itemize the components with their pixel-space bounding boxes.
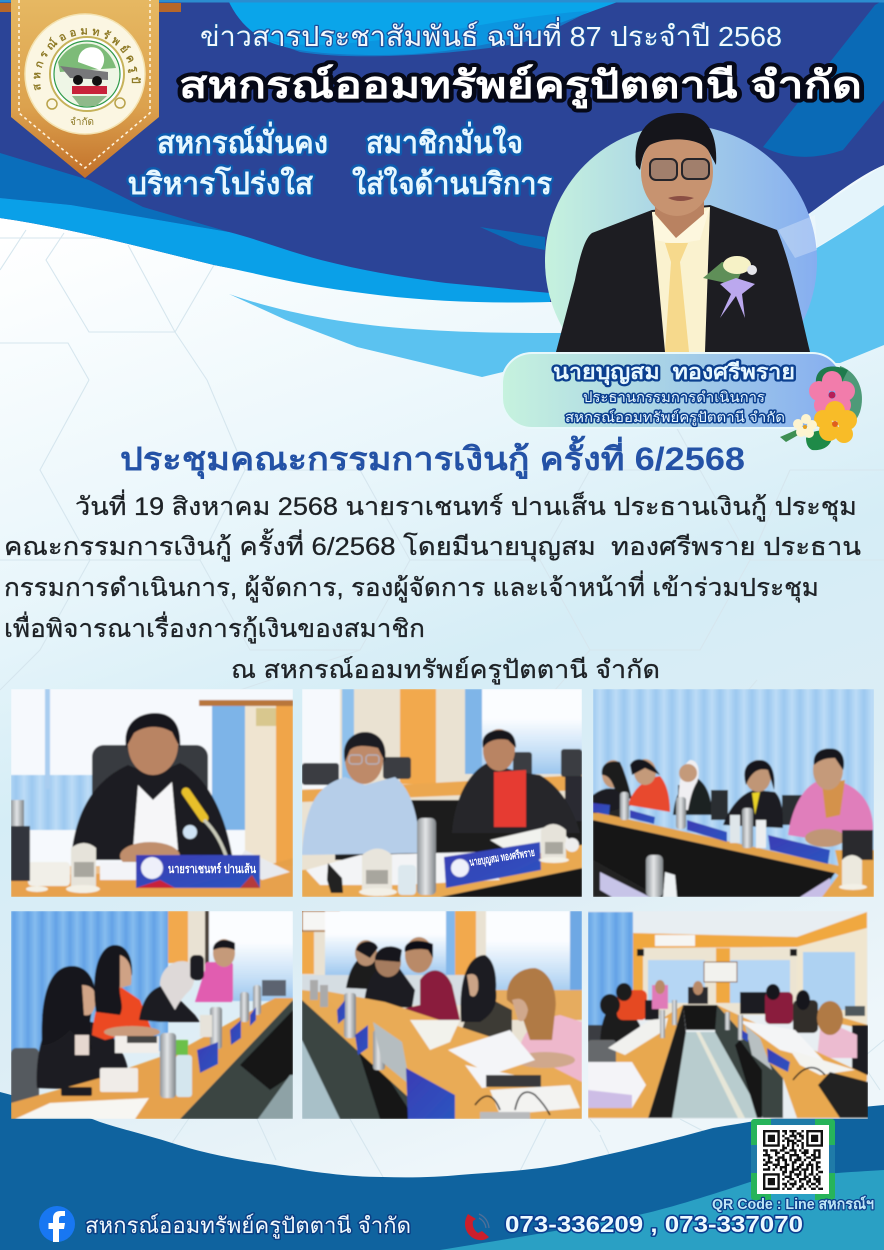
position: ประธานกรรมการดำเนินการ [583,389,766,405]
icon: phone [465,1214,489,1240]
seal: จำกัด [70,117,94,128]
organisation title: สหกรณ์ออมทรัพย์ครูปัตตานี จำกัด [179,64,862,109]
shirt and collar [652,207,710,352]
fern [838,366,862,430]
suit [556,205,810,352]
photo 1: chairman of loan committee at table [11,689,293,897]
body text: กรรมการดำเนินการ, ผู้จัดการ, รองผู้จัดการ และเจ้าหน้าที่ เข้าร่วมประชุม [4,570,819,603]
icon: facebook [39,1206,75,1242]
green frame [751,1119,835,1200]
lapel flower [703,256,757,318]
gold pennant [11,0,159,178]
nameplate text: นายราเชนทร์ ปานเส้น [168,862,257,876]
name: นายบุญสม ทองศรีพราย [553,360,795,386]
body text: วันที่ 19 สิงหาคม 2568 นายราเชนทร์ ปานเส็น ประธานเงินกู้ ประชุม [75,489,857,522]
organisation: สหกรณ์ออมทรัพย์ครูปัตตานี จำกัด [565,409,785,426]
white flower [793,414,817,438]
body text: คณะกรรมการเงินกู้ ครั้งที่ 6/2568 โดยมีนายบุญสม ทองศรีพราย ประธาน [4,528,861,562]
name plate [502,353,842,428]
phone numbers: 073-336209 , 073-337070 [505,1211,803,1237]
face [641,139,713,216]
white box [757,1125,829,1194]
body text: เพื่อพิจารณาเรื่องการกู้เงินของสมาชิก [4,611,425,644]
monstera [806,430,832,450]
dark leaf [816,366,848,390]
hibiscus [809,371,855,415]
header background waves [0,0,884,377]
icon: tropical flowers [780,366,862,450]
hexagon line pattern [0,230,884,1177]
stem [780,430,800,442]
yellow flower [814,401,857,443]
photo 3: members along table [593,689,874,897]
portrait of chairman [545,113,817,352]
portrait circle [545,128,817,328]
modules [763,1130,823,1190]
pill [502,353,842,428]
nameplate text: นายบุญสม ทองศรีพราย [468,846,536,870]
badge: ribbon with co-op seal [0,0,181,178]
footer waves [0,1092,884,1250]
glasses [650,159,709,180]
body text [4,489,861,685]
tie [665,243,689,352]
photo 2: two committee members [302,689,582,897]
meeting heading: ประชุมคณะกรรมการเงินกู้ ครั้งที่ 6/2568 [120,435,745,480]
slogans: บริหารโปร่งใส [128,165,314,201]
QR code [751,1119,835,1200]
newsletter issue line: ข่าวสารประชาสัมพันธ์ ฉบับที่ 87 ประจำปี 2568 [200,17,782,52]
photo 5: staff reviewing documents [302,911,582,1119]
slogans [128,121,552,201]
seal [24,13,146,135]
hair [635,113,716,170]
slogans: ใส่ใจด้านบริการ [352,166,552,201]
neck [655,201,704,238]
ribbon bar [0,3,181,12]
slogans: สหกรณ์มั่นคง [157,121,328,160]
body text: ณ สหกรณ์ออมทรัพย์ครูปัตตานี จำกัด [231,656,660,685]
QR caption: QR Code : Line สหกรณ์ฯ [712,1195,874,1213]
facebook page name: สหกรณ์ออมทรัพย์ครูปัตตานี จำกัด [85,1213,411,1239]
photo 6: wide view of meeting room [588,911,868,1119]
slogans: สมาชิกมั่นใจ [366,121,523,160]
photo 4: staff side of table [11,911,293,1119]
